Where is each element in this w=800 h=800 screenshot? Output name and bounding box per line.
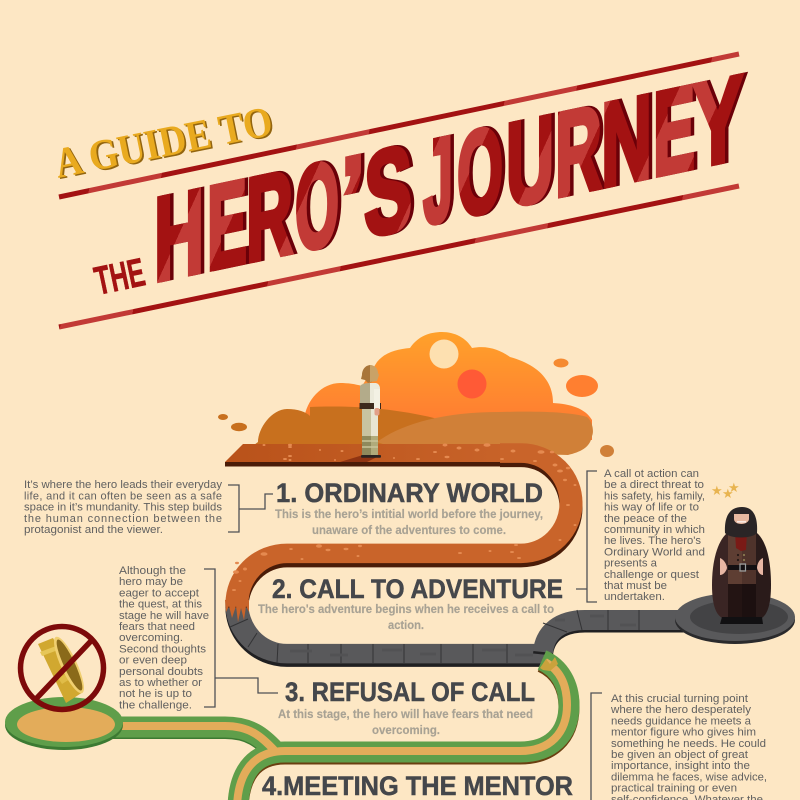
subtitle: action. xyxy=(388,620,424,632)
heading: the: THE xyxy=(91,250,149,304)
heading: a guide to: A GUIDE TO xyxy=(51,98,277,188)
heading: hero's journey: O xyxy=(295,136,339,277)
heading: hero's journey: O xyxy=(298,135,342,277)
stage 4: meeting the mentor xyxy=(262,693,767,800)
connector xyxy=(576,471,597,602)
heading: 3. REFUSAL OF CALL xyxy=(285,677,535,707)
description xyxy=(119,565,209,711)
mentor platform xyxy=(675,593,795,644)
title xyxy=(51,50,746,327)
road: orange stage one xyxy=(225,443,576,622)
description: undertaken. xyxy=(604,591,665,603)
description: challenge or quest xyxy=(604,569,699,581)
heading: hero's journey: Y xyxy=(696,50,747,193)
arm xyxy=(374,389,380,409)
top title rule xyxy=(59,54,739,197)
description: personal doubts xyxy=(119,666,204,678)
heading: hero's journey: U xyxy=(506,90,554,233)
description: the human connection between the xyxy=(24,513,222,525)
subtitle: This is the hero’s intitial world before the journey, xyxy=(275,509,543,521)
ground platform xyxy=(225,444,530,466)
description: It’s where the hero leads their everyday xyxy=(24,479,223,491)
shadow xyxy=(340,455,381,462)
icon: crossed-out coin xyxy=(20,626,104,710)
face xyxy=(370,365,379,382)
heading: hero's journey: E xyxy=(207,155,247,296)
description xyxy=(604,468,705,603)
description: or even deep xyxy=(119,655,187,667)
description: dilemma he faces, wise advice, xyxy=(611,771,767,783)
hand xyxy=(374,408,380,416)
icon: stars: ★ xyxy=(711,484,723,499)
description: his safety, his family, xyxy=(604,490,705,502)
heading: a guide to: A GUIDE TO xyxy=(52,99,278,189)
heading: hero's journey: E xyxy=(210,154,251,295)
description: the peace of the xyxy=(604,513,687,525)
heading: hero's journey: ’ xyxy=(341,130,365,268)
heading: hero's journey: H xyxy=(154,164,204,307)
description: stage he will have xyxy=(119,610,209,622)
heading: hero's journey: N xyxy=(601,70,652,213)
heading: hero's journey: J xyxy=(426,111,457,250)
road: grey branch to mentor platform xyxy=(230,610,700,663)
buttons xyxy=(737,554,739,561)
subtitle: The hero's adventure begins when he receives a call to xyxy=(258,604,554,616)
description: Second thoughts xyxy=(119,643,207,655)
heading: hero's journey: O xyxy=(457,101,503,243)
description: practical training or even xyxy=(611,783,737,795)
refusal platform xyxy=(5,697,123,750)
road: green stage three xyxy=(110,657,569,800)
hair xyxy=(725,507,757,538)
heading: hero's journey: Y xyxy=(693,50,743,193)
icon: stars: ★ xyxy=(728,481,740,496)
shoes xyxy=(361,455,381,458)
heading: 1. ORDINARY WORLD xyxy=(276,478,543,508)
description: the quest, at this xyxy=(119,599,203,611)
trousers xyxy=(362,409,371,436)
connector xyxy=(204,569,278,707)
subtitle xyxy=(275,509,543,537)
description: as to whether or xyxy=(119,677,202,689)
description: protagonist and the viewer. xyxy=(24,524,163,536)
description: hero may be xyxy=(119,576,183,588)
description: presents a xyxy=(604,558,658,570)
subtitle: At this stage, the hero will have fears that need xyxy=(278,709,533,721)
stage 2: call to adventure xyxy=(258,468,705,632)
description: mentor figure who gives him xyxy=(611,727,756,739)
description: needs guidance he meets a xyxy=(611,715,752,727)
belt xyxy=(728,565,757,570)
description: Although the xyxy=(119,565,186,577)
heading: hero's journey: J xyxy=(423,112,453,250)
description: life, and it can often be seen as a safe xyxy=(24,490,222,502)
description: A call ot action can xyxy=(604,468,699,480)
boots xyxy=(362,435,371,455)
dune: dark xyxy=(254,407,470,445)
heading: hero's journey: S xyxy=(364,120,412,263)
description: At this crucial turning point xyxy=(611,693,748,705)
description: that must be xyxy=(604,580,667,592)
heading: hero's journey: H xyxy=(158,163,208,306)
description: overcoming. xyxy=(119,632,183,644)
description: space in it’s mundanity. This step builds xyxy=(24,502,223,514)
character: hero xyxy=(340,365,381,462)
heading: hero's journey: N xyxy=(604,69,656,212)
heading: hero's journey: O xyxy=(460,100,507,242)
hair xyxy=(361,365,372,383)
stage 1: ordinary world xyxy=(24,478,543,537)
description: something he needs. He could xyxy=(611,738,766,750)
icon: stars: ★ xyxy=(722,487,734,502)
connector xyxy=(228,485,273,532)
orange sky cloud xyxy=(304,332,592,440)
description: not he is up to xyxy=(119,688,192,700)
character: mentor xyxy=(712,507,771,624)
heading: hero's journey: ’ xyxy=(344,129,368,267)
subtitle: unaware of the adventures to come. xyxy=(312,525,506,537)
desert landscape scene xyxy=(218,332,614,457)
road: grey stage two xyxy=(237,600,545,657)
description: be given an object of great xyxy=(611,749,748,761)
shirt xyxy=(360,383,370,403)
description: importance, insight into the xyxy=(611,760,750,772)
description: he lives. The hero's xyxy=(604,535,702,547)
description xyxy=(610,693,767,800)
connector xyxy=(591,693,602,800)
vest xyxy=(728,531,756,584)
belt xyxy=(360,403,381,409)
heading: hero's journey: E xyxy=(653,61,695,202)
description: community in which xyxy=(604,524,705,536)
heading: hero's journey: R xyxy=(246,145,293,288)
heading: hero's journey: R xyxy=(250,144,296,287)
description: be a direct threat to xyxy=(604,479,704,491)
description: eager to accept xyxy=(119,587,199,599)
subtitle xyxy=(278,709,533,737)
description: the challenge. xyxy=(119,699,192,711)
heading: hero's journey: R xyxy=(555,80,602,223)
stage 3: refusal of call xyxy=(119,565,535,737)
robe xyxy=(712,530,742,620)
icon: stars xyxy=(711,481,740,502)
heading: hero's journey: S xyxy=(368,119,415,262)
heading: hero's journey: U xyxy=(510,89,557,232)
dune: light xyxy=(377,412,593,455)
sun: pale xyxy=(430,340,458,368)
heading: hero's journey: R xyxy=(558,79,606,222)
scarf xyxy=(735,532,747,551)
description: his way of life or to xyxy=(604,502,699,514)
sun: red xyxy=(458,370,486,398)
subtitle: overcoming. xyxy=(372,725,440,737)
description: fears that need xyxy=(119,621,195,633)
description: where the hero desperately xyxy=(610,704,752,716)
boots xyxy=(720,617,763,624)
face xyxy=(734,514,749,524)
legs xyxy=(728,584,742,617)
description: Ordinary World and xyxy=(604,546,705,558)
heading: 2. CALL TO ADVENTURE xyxy=(272,574,563,604)
description xyxy=(24,479,223,536)
heading: hero's journey: E xyxy=(656,60,698,201)
bottom title rule xyxy=(59,186,739,327)
subtitle xyxy=(258,604,554,632)
heading: hero's journey xyxy=(154,50,746,307)
floating blobs xyxy=(218,358,614,457)
hands xyxy=(720,558,763,575)
